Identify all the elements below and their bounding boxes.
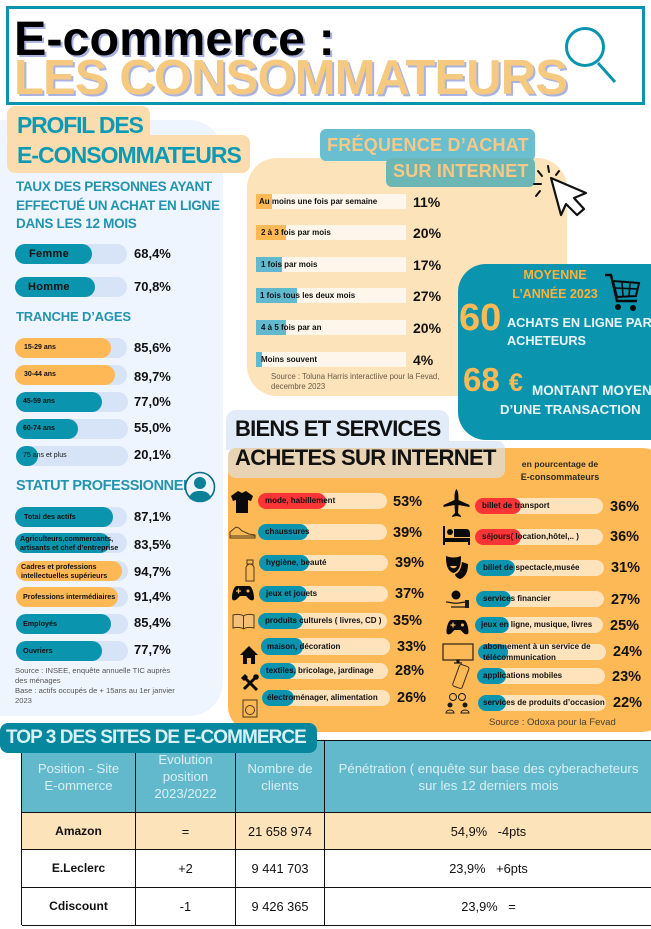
bar: au moins une fois par semaine: Au moins une fois par semaine bbox=[259, 197, 377, 206]
bar: employes: 85,4% bbox=[134, 615, 171, 630]
bar: 4 a 5 fois par an: 20% bbox=[413, 320, 441, 336]
heading: profil des e-consommateurs bbox=[7, 106, 250, 173]
bar: agriculteurs: Agriculteurs,commercants, bbox=[20, 534, 113, 543]
header: evolution bbox=[136, 741, 236, 813]
header: position: E-ommerce bbox=[44, 778, 113, 792]
heading tab bottom bbox=[228, 448, 505, 478]
subheading: taux des personnes: DANS LES 12 MOIS bbox=[16, 216, 136, 231]
bar: services financier: services financier bbox=[483, 594, 551, 603]
row: leclerc site: E.Leclerc bbox=[52, 861, 105, 875]
source: insee bbox=[15, 666, 175, 705]
icon: magnifying glass bbox=[565, 27, 616, 83]
bar: applications mobiles bbox=[477, 668, 642, 684]
panel: moyenne 2023 bbox=[458, 264, 651, 440]
row: leclerc clients bbox=[236, 850, 325, 888]
bar: 75 ans et plus: 20,1% bbox=[134, 447, 171, 462]
bar: jeux en ligne: jeux en ligne, musique, livres bbox=[481, 620, 592, 629]
bar: 15-29 ans: 85,6% bbox=[134, 340, 171, 355]
bar: moins souvent: 4% bbox=[413, 352, 433, 368]
heading tab top bbox=[226, 410, 449, 448]
bar: ouvriers: Ouvriers bbox=[23, 646, 53, 655]
bar: jeux et jouets: jeux et jouets bbox=[266, 589, 317, 598]
bar: femme: 68,4% bbox=[134, 246, 171, 261]
bar: 1 fois par mois: 1 fois par mois bbox=[261, 260, 317, 269]
bar: 4 a 5 fois par an: 4 à 5 fois par an bbox=[261, 323, 321, 332]
bar: abonnement: 24% bbox=[613, 644, 642, 660]
bar: moins souvent bbox=[256, 352, 433, 368]
subheading: tranche d'ages: TRANCHE D’AGES bbox=[16, 309, 131, 324]
bar: textiles, bricolage, jardinage: textiles, bricolage, jardinage bbox=[266, 666, 374, 675]
bar: 75 ans et plus bbox=[16, 446, 171, 466]
bar: cadres: 94,7% bbox=[134, 564, 171, 579]
bar: au moins une fois par semaine: 11% bbox=[413, 194, 440, 210]
bar: employes: Employés bbox=[23, 619, 57, 628]
bar: total des actifs bbox=[15, 507, 171, 527]
bar: employes bbox=[16, 614, 171, 634]
bar: chaussures: chaussures bbox=[265, 527, 309, 536]
icon: airplane bbox=[443, 489, 470, 519]
bar: 15-29 ans bbox=[15, 338, 171, 358]
bar: billet de spectacle: billet de spectacle,musée bbox=[483, 563, 580, 572]
text: achats en ligne: ACHETEURS bbox=[507, 334, 586, 348]
bar: agriculteurs bbox=[15, 533, 171, 553]
icon: television bbox=[442, 643, 474, 664]
bar: maison, decoration bbox=[261, 638, 426, 655]
text: montant moyen: MONTANT MOYEN bbox=[532, 383, 651, 398]
icon: person in circle bbox=[184, 472, 216, 502]
bar: services de produits d'occasion: services de produits d’occasion bbox=[483, 698, 605, 707]
icon: smartphone bbox=[451, 664, 471, 689]
bar: total des actifs: Total des actifs bbox=[24, 512, 76, 521]
bar: mode, habillement: 53% bbox=[393, 494, 422, 510]
icon: cursor click bbox=[533, 165, 588, 216]
bar: billet de transport: 36% bbox=[610, 499, 639, 515]
bar: professions intermediaires: Professions intermédiaires bbox=[23, 592, 115, 601]
bar: 30-44 ans: 30-44 ans bbox=[24, 371, 56, 378]
heading: biens et services bbox=[226, 410, 505, 478]
source: toluna bbox=[271, 372, 439, 391]
bar: textiles, bricolage, jardinage: 28% bbox=[395, 663, 424, 679]
bar: maison, decoration: 33% bbox=[397, 639, 426, 655]
bar: 1 fois par mois bbox=[256, 257, 441, 273]
row: amazon evolution bbox=[136, 813, 236, 850]
bar: jeux en ligne bbox=[475, 617, 640, 633]
bar: homme bbox=[15, 277, 171, 297]
bar: ouvriers: 77,7% bbox=[134, 642, 171, 657]
bar: sejours: séjours( location,hôtel,.. ) bbox=[482, 532, 579, 541]
moyenne heading: L’ANNÉE 2023 bbox=[512, 287, 598, 301]
header: penetration: sur les 12 derniers mois bbox=[418, 778, 558, 792]
bar: abonnement bbox=[478, 644, 643, 660]
bar: 45-59 ans: 45-59 ans bbox=[23, 398, 55, 405]
bar: homme: Homme bbox=[28, 281, 70, 293]
row: cdiscount site: Cdiscount bbox=[49, 899, 108, 913]
bar: electromenager, alimentation: 26% bbox=[397, 690, 426, 706]
heading tab top bbox=[7, 106, 150, 146]
heading text line 2: E-CONSOMMATEURS bbox=[17, 142, 241, 168]
bar: maison, decoration: maison, décoration bbox=[267, 642, 340, 651]
panel: profil background bbox=[0, 120, 223, 716]
bar: 45-59 ans bbox=[16, 392, 171, 412]
icon: sneaker bbox=[230, 526, 256, 538]
note: en pourcentage: en pourcentage de bbox=[522, 459, 598, 469]
heading text line 2: ACHETES SUR INTERNET bbox=[235, 445, 496, 470]
bar: ouvriers bbox=[16, 641, 171, 661]
header: penetration bbox=[325, 741, 651, 813]
icon: theatre masks bbox=[445, 555, 469, 580]
bar: sejours: 36% bbox=[610, 529, 639, 545]
row: cdiscount penetration: 23,9% = bbox=[461, 899, 516, 914]
bar: agriculteurs: 83,5% bbox=[134, 537, 171, 552]
row: amazon penetration bbox=[325, 813, 651, 850]
icon: bottle bbox=[246, 560, 254, 582]
bar: jeux en ligne: 25% bbox=[610, 618, 639, 634]
bar: textiles, bricolage, jardinage bbox=[260, 663, 425, 679]
bar: cadres bbox=[16, 561, 171, 581]
source: insee: 2023 bbox=[15, 696, 32, 705]
row: amazon penetration: 54,9% -4pts bbox=[451, 824, 526, 838]
bar: services de produits d'occasion bbox=[478, 695, 643, 711]
bar: 45-59 ans: 77,0% bbox=[134, 394, 171, 409]
row: amazon site: Amazon bbox=[55, 824, 102, 838]
row: amazon clients bbox=[236, 813, 325, 850]
bar: sejours bbox=[475, 529, 640, 545]
bar: 60-74 ans: 60-74 ans bbox=[23, 425, 55, 432]
bar: abonnement: télécommunication bbox=[483, 653, 556, 662]
heading text line 1: BIENS ET SERVICES bbox=[235, 416, 441, 441]
icon: t-shirt bbox=[231, 491, 253, 513]
bar: 1 fois tous les deux mois: 27% bbox=[413, 288, 441, 304]
bar: professions intermediaires: 91,4% bbox=[134, 589, 171, 604]
heading tab bottom bbox=[7, 135, 250, 173]
title banner bbox=[6, 6, 645, 105]
row: amazon site bbox=[22, 813, 136, 850]
bar: 2 a 3 fois par mois bbox=[256, 225, 441, 241]
icon: shopping cart bbox=[605, 274, 640, 311]
icon: hand with coin bbox=[445, 587, 470, 612]
header: evolution: position bbox=[163, 769, 208, 784]
bar: 1 fois par mois: 17% bbox=[413, 257, 441, 273]
panel: biens et services background bbox=[228, 448, 651, 732]
icon: open book bbox=[232, 613, 255, 630]
bar: cadres: Cadres et professions bbox=[21, 562, 96, 571]
heading tab middle bbox=[226, 441, 505, 450]
note: en pourcentage: E-consommateurs bbox=[521, 472, 599, 482]
bar: produits culturels: produits culturels ( livres, CD ) bbox=[265, 616, 381, 625]
text: achats en ligne bbox=[507, 316, 651, 348]
bar: 2 a 3 fois par mois: 20% bbox=[413, 225, 441, 241]
bar: mode, habillement: mode, habillement bbox=[265, 496, 335, 505]
icon: gamepad bbox=[232, 586, 254, 600]
bar: au moins une fois par semaine bbox=[256, 194, 440, 210]
row: cdiscount evolution: -1 bbox=[180, 899, 191, 914]
row: leclerc penetration bbox=[325, 850, 651, 888]
row: amazon evolution: = bbox=[182, 824, 189, 838]
bar: 60-74 ans bbox=[16, 419, 171, 439]
bar: 4 a 5 fois par an bbox=[256, 320, 441, 336]
table: top 3 des sites bbox=[21, 740, 651, 925]
bar: billet de transport: billet de transport bbox=[482, 501, 550, 510]
bar: produits culturels bbox=[258, 613, 423, 629]
subheading: taux des personnes: TAUX DES PERSONNES AYANT bbox=[16, 179, 212, 194]
header: position bbox=[22, 741, 136, 813]
row: leclerc clients: 9 441 703 bbox=[252, 861, 308, 876]
bar: total des actifs: 87,1% bbox=[134, 509, 171, 524]
source: insee: des ménages bbox=[15, 676, 61, 685]
figure: 68 euros: 68 € bbox=[463, 361, 523, 398]
bar: services financier: 27% bbox=[611, 592, 640, 608]
bar: billet de transport bbox=[475, 498, 640, 514]
title line: les consommateurs: LES CONSOMMATEURS bbox=[14, 50, 567, 104]
bar: produits culturels: 35% bbox=[393, 613, 422, 629]
moyenne heading bbox=[512, 268, 598, 301]
bar: 2 a 3 fois par mois: 2 à 3 fois par mois bbox=[261, 228, 331, 237]
heading text line 2: SUR INTERNET bbox=[393, 161, 529, 181]
row: cdiscount clients: 9 426 365 bbox=[252, 899, 308, 914]
header: nombre de clients: clients bbox=[261, 778, 299, 792]
bar: 30-44 ans: 89,7% bbox=[134, 369, 171, 384]
subheading: statut professionnel: STATUT PROFESSIONNEL bbox=[16, 478, 192, 494]
title line: E-commerce: E-commerce : bbox=[14, 12, 335, 66]
icon: two people exchanging bbox=[445, 692, 470, 714]
bar: 1 fois tous les deux mois bbox=[256, 288, 441, 304]
icon: gamepad online bbox=[446, 619, 469, 635]
heading text line 1: PROFIL DES bbox=[17, 112, 143, 138]
subheading: taux des personnes bbox=[16, 179, 220, 231]
row: cdiscount penetration bbox=[325, 888, 651, 926]
bar: electromenager, alimentation: électroménager, alimentation bbox=[267, 693, 378, 702]
header: penetration: Pénétration ( enquête sur base des cyberacheteurs bbox=[339, 760, 638, 776]
heading tab top bbox=[320, 129, 535, 161]
row: leclerc site bbox=[22, 850, 136, 888]
bar: homme: 70,8% bbox=[134, 279, 171, 294]
bar: agriculteurs: artisants et chef d’entreprise bbox=[20, 543, 118, 552]
source: insee: Source : INSEE, enquête annuelle TIC auprès bbox=[15, 666, 170, 675]
bar: moins souvent: Moins souvent bbox=[261, 355, 317, 364]
heading text line 1: FRÉQUENCE D’ACHAT bbox=[327, 135, 529, 155]
bar: billet de spectacle: 31% bbox=[611, 560, 640, 576]
source: toluna: decembre 2023 bbox=[271, 382, 325, 391]
header: nombre de clients: Nombre de bbox=[247, 760, 313, 776]
panel: frequence d'achat background bbox=[247, 158, 567, 396]
row: cdiscount clients bbox=[236, 888, 325, 926]
row: leclerc evolution bbox=[136, 850, 236, 888]
text: achats en ligne: ACHATS EN LIGNE PAR bbox=[507, 316, 651, 330]
row: cdiscount site bbox=[22, 888, 136, 926]
row: leclerc evolution: +2 bbox=[178, 861, 193, 876]
icon: house bbox=[240, 646, 258, 664]
note: en pourcentage bbox=[521, 459, 599, 482]
bar: femme: Femme bbox=[29, 248, 69, 260]
heading: frequence d'achat bbox=[320, 129, 535, 187]
bar: 15-29 ans: 15-29 ans bbox=[24, 344, 56, 351]
row: leclerc penetration: 23,9% +6pts bbox=[449, 861, 528, 876]
heading: top 3 des sites de e-commerce bbox=[0, 723, 317, 753]
bar: chaussures bbox=[258, 524, 422, 541]
bar: jeux et jouets bbox=[259, 586, 424, 602]
subheading: taux des personnes: EFFECTUÉ UN ACHAT EN LIGNE bbox=[16, 198, 220, 212]
row: amazon clients: 21 658 974 bbox=[248, 824, 312, 838]
bar: jeux et jouets: 37% bbox=[395, 586, 424, 602]
bar: professions intermediaires bbox=[16, 587, 171, 607]
header: nombre de clients bbox=[236, 741, 325, 813]
bar: hygiene, beaute bbox=[259, 555, 424, 571]
bar: services financier bbox=[476, 591, 641, 607]
text: d'une transaction: D’UNE TRANSACTION bbox=[500, 402, 641, 417]
bar: chaussures: 39% bbox=[393, 525, 422, 541]
icon: washing machine bbox=[242, 699, 258, 718]
header: evolution: 2023/2022 bbox=[154, 786, 217, 801]
source: odoxa: Source : Odoxa pour la Fevad bbox=[489, 717, 616, 728]
bar: cadres: intellectuelles supérieurs bbox=[21, 571, 107, 580]
header: evolution: Evolution bbox=[158, 752, 213, 767]
source: insee: Base : actifs occupés de + 15ans au 1er janvier bbox=[15, 686, 175, 695]
bar: services de produits d'occasion: 22% bbox=[613, 695, 642, 711]
row: cdiscount evolution bbox=[136, 888, 236, 926]
bar: applications mobiles: applications mobiles bbox=[483, 671, 562, 680]
moyenne heading: MOYENNE bbox=[523, 268, 587, 282]
figure: 60: 60 bbox=[459, 297, 501, 339]
heading: top 3 des sites de e-commerce: TOP 3 DES SITES DE E-COMMERCE bbox=[6, 727, 306, 748]
bar: electromenager, alimentation bbox=[262, 690, 427, 706]
icon: tools bbox=[241, 674, 259, 692]
bar: applications mobiles: 23% bbox=[612, 669, 641, 685]
bar: hygiene, beaute: 39% bbox=[395, 555, 424, 571]
header: position: Position - Site bbox=[38, 760, 119, 776]
bar: 60-74 ans: 55,0% bbox=[134, 420, 171, 435]
heading tab bottom bbox=[386, 158, 535, 187]
bar: billet de spectacle bbox=[476, 560, 641, 576]
bar: 75 ans et plus: 75 ans et plus bbox=[23, 452, 67, 459]
bar: mode, habillement bbox=[258, 493, 422, 510]
bar: 1 fois tous les deux mois: 1 fois tous les deux mois bbox=[260, 291, 355, 300]
source: toluna: Source : Toluna Harris interactiive pour la Fevad, bbox=[271, 372, 439, 381]
icon: bed bbox=[443, 526, 470, 545]
bar: 30-44 ans bbox=[15, 365, 171, 385]
bar: femme bbox=[15, 244, 171, 264]
bar: abonnement: abonnement à un service de bbox=[483, 642, 591, 651]
bar: hygiene, beaute: hygiène, beauté bbox=[266, 558, 326, 567]
